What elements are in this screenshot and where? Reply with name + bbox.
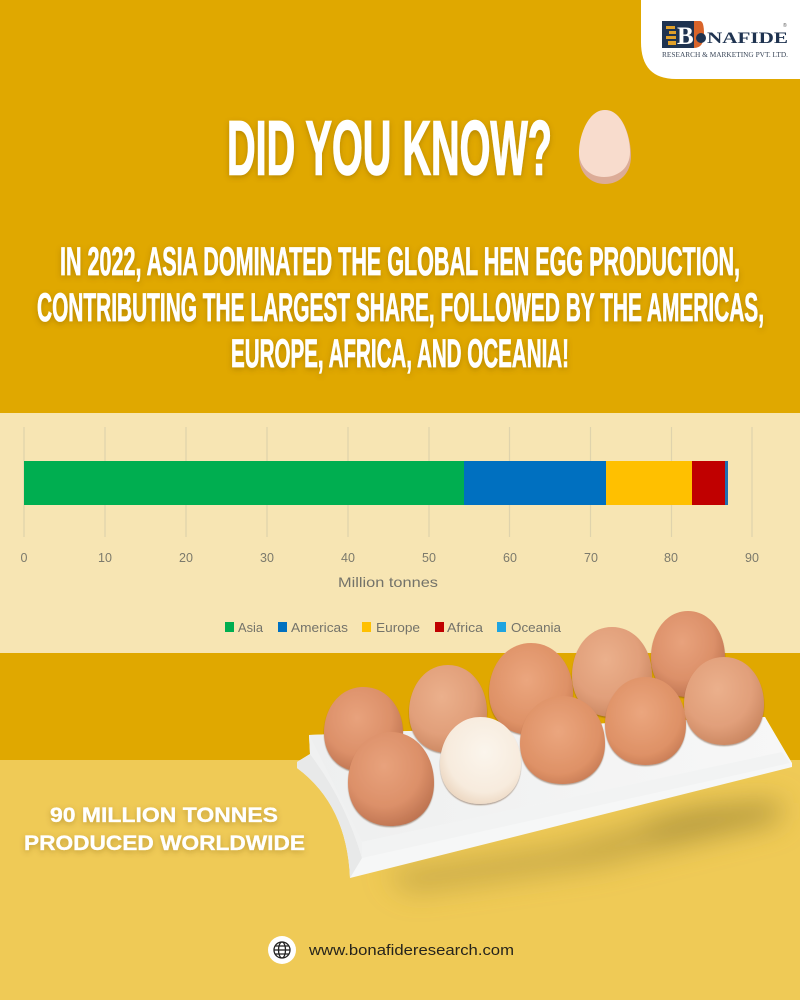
back row eggs [324, 611, 725, 772]
logo: Bonafide mark: ® [783, 22, 787, 29]
logo: Bonafide mark [662, 21, 788, 59]
text block: key fact [37, 240, 764, 376]
panel: stacked bar chart [0, 413, 800, 653]
axis labels: 50 [422, 551, 436, 565]
icon: egg [579, 110, 631, 184]
icon: globe [268, 936, 296, 964]
axis labels: 0 [21, 551, 28, 565]
axis labels: 20 [179, 551, 193, 565]
tray shadow [385, 800, 785, 892]
legend: Americas [291, 621, 348, 635]
logo: Bonafide mark: NAFIDE [707, 30, 788, 47]
logo: Bonafide mark: B [677, 23, 694, 50]
axis labels: 80 [664, 551, 678, 565]
photo: egg tray with ten eggs [297, 611, 792, 878]
legend [225, 621, 561, 635]
legend: Europe [376, 621, 420, 635]
background: upper gold panel [0, 0, 800, 760]
background: lower light yellow panel [0, 760, 800, 1000]
callout: 90 million tonnes: PRODUCED WORLDWIDE [24, 832, 305, 855]
axis labels: 90 [745, 551, 759, 565]
tray [297, 717, 792, 878]
callout: 90 million tonnes [24, 804, 305, 855]
axis labels: 70 [584, 551, 598, 565]
website url: www.bonafideresearch.com [308, 942, 514, 959]
axis labels: 10 [98, 551, 112, 565]
logo: Bonafide mark: RESEARCH & MARKETING PVT. LTD. [662, 51, 788, 59]
legend: Africa [447, 621, 483, 635]
axis title: Million tonnes [338, 574, 438, 590]
axis labels: 60 [503, 551, 517, 565]
logo panel [641, 0, 800, 79]
legend: Asia [238, 621, 263, 635]
stacked bar [24, 461, 728, 505]
axis labels: 40 [341, 551, 355, 565]
legend: Oceania [511, 621, 561, 635]
front row eggs [348, 657, 764, 826]
axis labels: 30 [260, 551, 274, 565]
callout: 90 million tonnes: 90 MILLION TONNES [50, 804, 278, 827]
axis labels [21, 551, 759, 565]
